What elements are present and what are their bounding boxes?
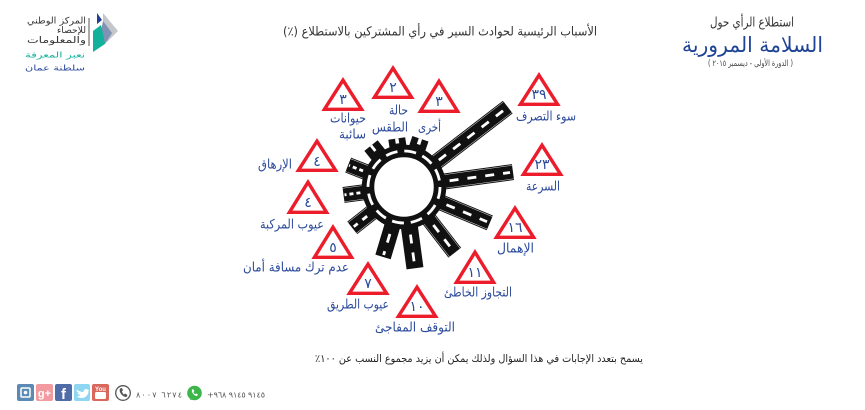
road: التجاوز الخاطئ: [416, 206, 461, 258]
item: الإهمال 16: الإهمال: [497, 242, 534, 256]
item: الإرهاق 4: الإرهاق: [258, 158, 292, 172]
item: سوء التصرف 39: ٣٩: [531, 87, 547, 103]
item: عيوب المركبة 4: [260, 182, 327, 232]
item: الإرهاق 4: ٤: [313, 154, 321, 170]
survey edition: ( الدورة الأولى - ديسمبر ٢٠١٥ ): [708, 58, 793, 69]
item: أخرى 3: [418, 81, 458, 136]
icon: google plus: [36, 384, 53, 401]
icon: phone: [116, 386, 130, 400]
item: التوقف المفاجئ 10: التوقف المفاجئ: [375, 320, 455, 336]
icon: google plus: g+: [38, 388, 51, 400]
item: عيوب المركبة 4: ٤: [304, 195, 312, 211]
item: عيوب الطريق 7: [327, 264, 389, 312]
logo text: centre name: المركز الوطني: [27, 16, 86, 26]
item: السرعة 23: ٢٣: [534, 157, 550, 173]
icon: instagram: [17, 384, 34, 401]
road: السرعة: [433, 164, 514, 191]
logo slogan: نعبر المعرفة: [25, 50, 85, 60]
road: حالة الطقس: [388, 137, 408, 159]
item: أخرى 3: ٣: [435, 94, 443, 110]
logo: [25, 13, 118, 72]
logo text: centre name: والمعلومات: [27, 36, 86, 46]
item: حيوانات سائبة 3: حيوانات: [330, 112, 366, 126]
item: التجاوز الخاطئ 11: ١١: [467, 265, 483, 281]
road: حيوانات سائبة: [364, 140, 392, 169]
item: حيوانات سائبة 3: [324, 80, 366, 142]
survey kicker: استطلاع الرأي حول: [710, 14, 794, 30]
survey heading: [682, 14, 823, 69]
contact bar: [17, 384, 265, 403]
whatsapp number: +٩٦٨ ٩١٤٥ ٩١٤٥: [207, 390, 265, 400]
item: السرعة 23: [523, 145, 561, 194]
item: سوء التصرف 39: سوء التصرف: [516, 110, 576, 124]
item: عدم ترك مسافة أمان 5: ٥: [329, 240, 337, 256]
item: حيوانات سائبة 3: سائبة: [339, 128, 366, 142]
logo text: centre name: للإحصاء: [57, 26, 86, 36]
icon: youtube: You: [95, 387, 106, 393]
logo text: centre name: [27, 16, 90, 46]
item: التجاوز الخاطئ 11: التجاوز الخاطئ: [444, 286, 512, 300]
item: الإهمال 16: [496, 208, 534, 256]
road: أخرى: [406, 136, 428, 161]
item: عيوب الطريق 7: عيوب الطريق: [327, 298, 389, 312]
item: الإهمال 16: ١٦: [507, 220, 523, 236]
icon: whatsapp: [187, 386, 202, 400]
item: التجاوز الخاطئ 11: [444, 252, 512, 300]
item: السرعة 23: السرعة: [526, 180, 560, 194]
logo mark: [93, 13, 118, 52]
item: عدم ترك مسافة أمان 5: [243, 227, 352, 276]
survey name: السلامة المرورية: [682, 33, 823, 57]
road: سوء التصرف: [423, 101, 513, 175]
item: حالة الطقس 2: [372, 68, 412, 136]
item: حيوانات سائبة 3: ٣: [339, 92, 347, 108]
item: الإرهاق 4: [258, 141, 336, 172]
icon: youtube: [92, 384, 109, 401]
ring road: [368, 151, 440, 223]
icon: twitter: [74, 384, 90, 401]
road: عيوب المركبة: [342, 183, 375, 203]
title: الأسباب الرئيسية لحوادث السير في رأي المشتركين بالاستطلاع (٪): [283, 22, 597, 40]
icon: facebook: [55, 384, 72, 403]
road: الإرهاق: [345, 158, 379, 184]
roundabout diagram: [342, 101, 514, 269]
item: عيوب المركبة 4: عيوب المركبة: [260, 218, 324, 232]
footnote: يسمح بتعدد الإجابات في هذا السؤال ولذلك يمكن أن يزيد مجموع النسب عن ١٠٠٪: [315, 351, 643, 365]
road: الإهمال: [429, 191, 493, 230]
logo country: سلطنة عمان: [25, 64, 85, 72]
item: حالة الطقس 2: ٢: [389, 80, 397, 96]
item: سوء التصرف 39: [516, 75, 576, 124]
item: التوقف المفاجئ 10: ١٠: [409, 299, 425, 315]
item: حالة الطقس 2: حالة: [389, 104, 408, 118]
item: عدم ترك مسافة أمان 5: عدم ترك مسافة أمان: [243, 258, 349, 276]
road: عيوب الطريق: [375, 213, 403, 259]
icon: facebook: f: [61, 386, 67, 403]
item: حالة الطقس 2: الطقس: [372, 120, 408, 136]
item: عيوب الطريق 7: ٧: [364, 276, 372, 292]
item: أخرى 3: أخرى: [418, 118, 441, 136]
road: عدم ترك مسافة أمان: [347, 199, 385, 234]
road: التوقف المفاجئ: [400, 216, 423, 269]
item: التوقف المفاجئ 10: [375, 287, 455, 336]
phone number: ٨٠٠٧ ٦٢٧٤: [136, 390, 182, 400]
